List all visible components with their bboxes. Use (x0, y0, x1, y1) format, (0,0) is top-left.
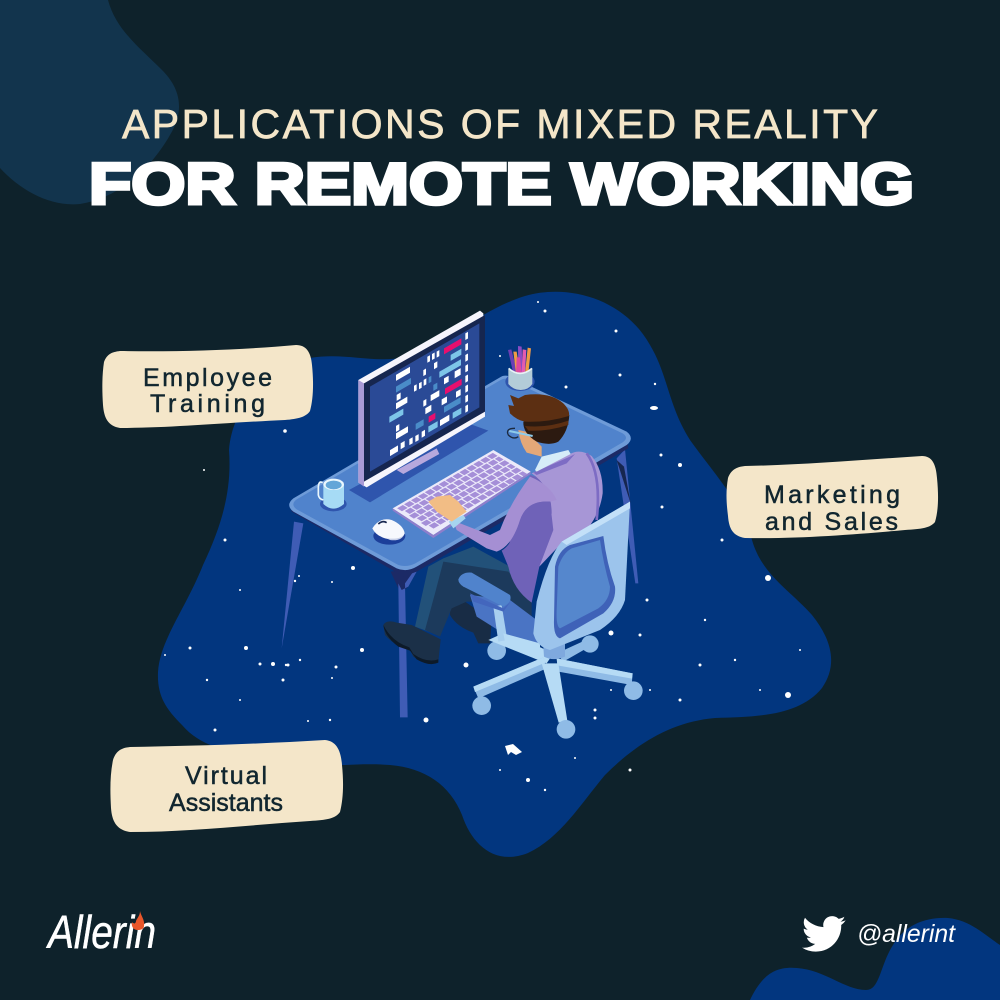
card: marketing and sales: Marketing (764, 481, 900, 509)
coffee mug (318, 479, 347, 511)
bottom-right background blob (750, 918, 1000, 1000)
title line 1: APPLICATIONS OF MIXED REALITY (122, 101, 878, 147)
card: virtual assistants: Assistants (169, 789, 283, 817)
central blue blob (158, 292, 831, 857)
card: virtual assistants (110, 740, 343, 832)
card: employee training (102, 345, 313, 428)
card: virtual assistants: Virtual (185, 762, 267, 790)
title line 2: FOR REMOTE WORKING (89, 152, 914, 217)
Allerin logo: Allerin (45, 906, 156, 958)
person head and glasses (507, 394, 569, 457)
monitor (349, 311, 488, 502)
stars scattered on blob (164, 301, 801, 791)
icon: twitter bird (802, 916, 846, 952)
person torso, arm and hand (428, 450, 603, 603)
keyboard (393, 450, 531, 538)
screen data blocks (389, 332, 468, 457)
person legs and shoes (383, 547, 532, 664)
card: marketing and sales (726, 456, 938, 538)
computer mouse (372, 519, 405, 545)
card: marketing and sales: and Sales (765, 508, 898, 536)
isometric desk illustration (282, 311, 643, 739)
office chair seat and back (458, 502, 630, 650)
card: employee training: Training (150, 390, 265, 418)
twitter handle: @allerint (857, 920, 956, 948)
top-left background blob (0, 0, 179, 204)
desk legs (282, 449, 638, 717)
desk top (289, 376, 631, 577)
pencil cup (505, 346, 535, 391)
card: employee training: Employee (143, 364, 272, 392)
chair back legs and base (472, 632, 643, 739)
